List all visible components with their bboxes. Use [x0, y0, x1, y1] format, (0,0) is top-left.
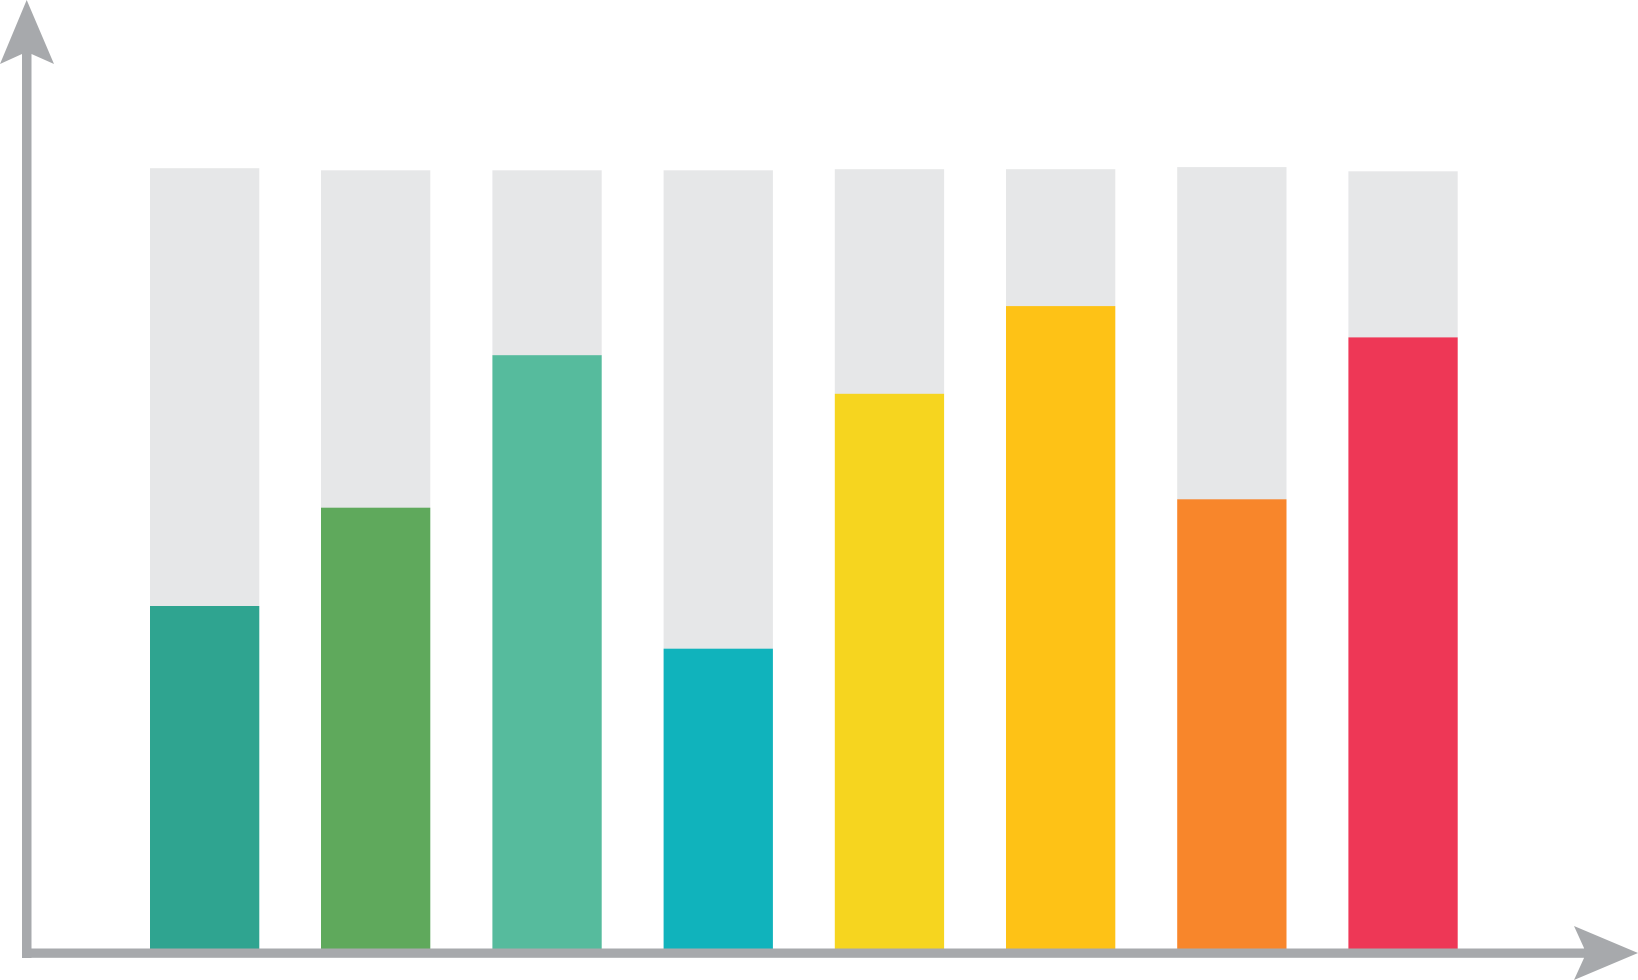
- bar 6: amber: [1006, 169, 1115, 949]
- bar 7: orange: [1177, 167, 1286, 949]
- bar 1: teal: [150, 168, 259, 949]
- bar 2: green: [321, 170, 430, 949]
- bar 3: mint: [492, 170, 602, 949]
- y axis arrow: [0, 0, 54, 958]
- bar 5: yellow: [835, 169, 944, 949]
- x axis arrow: [22, 926, 1638, 980]
- bar 4: cyan: [664, 170, 773, 949]
- bar 8: red: [1348, 171, 1458, 949]
